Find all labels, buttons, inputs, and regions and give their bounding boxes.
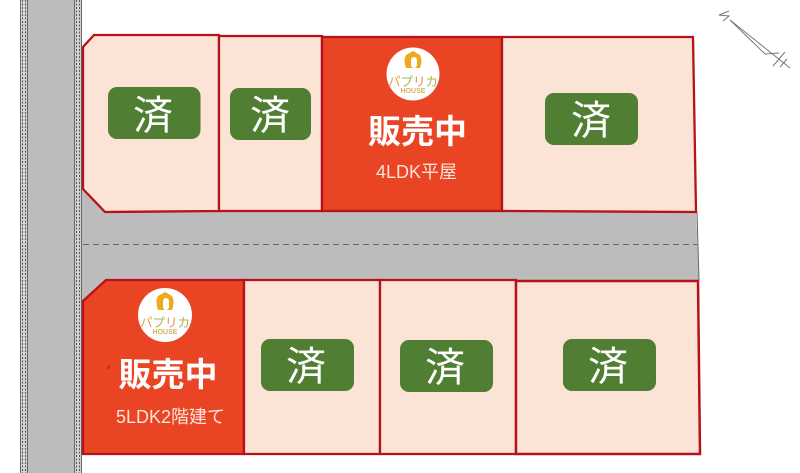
on sale heading: 販売中 <box>118 356 218 393</box>
sold badge 7: 済 <box>425 346 465 390</box>
logo: Papurika House <box>386 48 440 100</box>
logo: Papurika House: パプリカ <box>140 316 190 330</box>
lot 3: on sale <box>322 37 502 211</box>
icon: bell pepper <box>156 292 174 310</box>
horizontal road <box>82 176 699 302</box>
sold badge 8 <box>563 339 656 391</box>
north arrow <box>719 11 790 68</box>
sold badge 6 <box>261 339 354 391</box>
sold badge 4 <box>545 93 638 145</box>
logo: Papurika House: パプリカ <box>388 75 438 89</box>
logo: Papurika House: HOUSE <box>153 329 178 336</box>
sold badge 1 <box>108 87 200 139</box>
vertical road <box>20 0 82 473</box>
lot 7: sold <box>380 280 516 454</box>
sold badge 8: 済 <box>588 345 628 389</box>
on sale heading: 販売中 <box>368 113 467 150</box>
lot 2: sold <box>219 36 322 211</box>
lot 8: sold <box>516 281 700 454</box>
logo: Papurika House <box>138 288 192 342</box>
sold badge 2: 済 <box>250 94 290 138</box>
lot 1: sold <box>83 35 219 212</box>
sold badge 2 <box>230 88 311 140</box>
icon: bell pepper <box>404 51 422 68</box>
floor plan label: 5LDK2階建て <box>116 407 225 427</box>
sold badge 4: 済 <box>571 99 611 143</box>
stray mark <box>107 365 110 369</box>
lot 5: on sale <box>83 280 244 454</box>
lot 6: sold <box>244 280 380 454</box>
sold badge 1: 済 <box>133 94 173 138</box>
floor plan label: 4LDK平屋 <box>376 162 457 182</box>
sold badge 7 <box>400 340 493 392</box>
sold badge 6: 済 <box>286 345 326 389</box>
logo: Papurika House: HOUSE <box>401 88 426 95</box>
lot 4: sold <box>502 37 696 212</box>
